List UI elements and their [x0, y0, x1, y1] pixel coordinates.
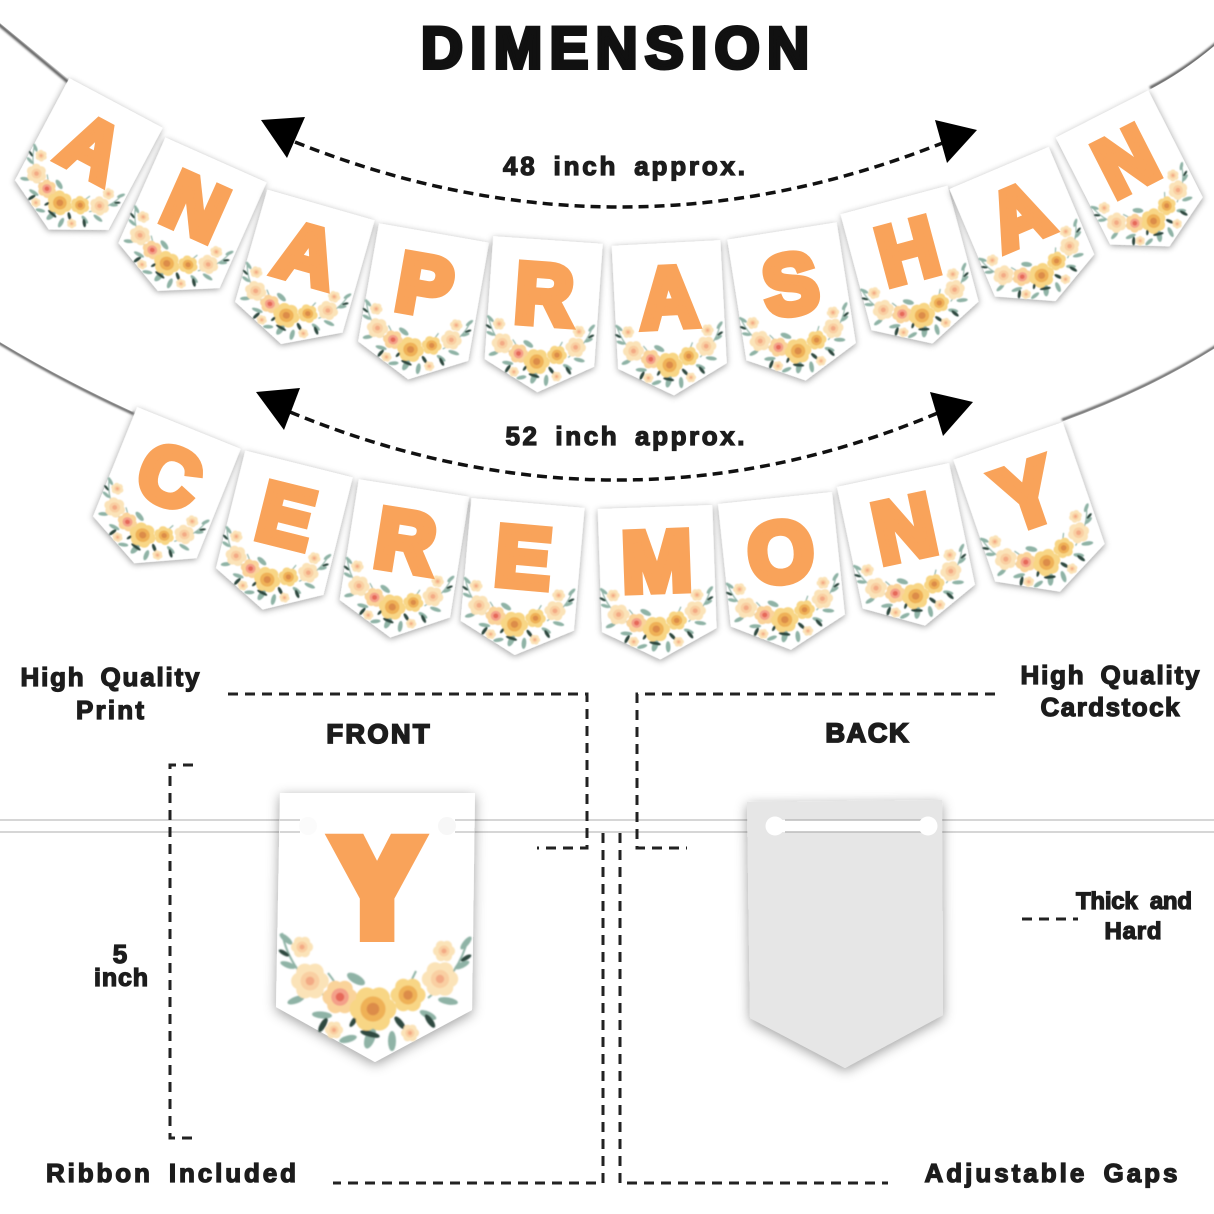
flag C: C [125, 424, 214, 530]
label: high quality cardstock: High Quality [1020, 660, 1200, 690]
flag Y: Y [984, 440, 1069, 551]
flag P: P [390, 236, 459, 336]
label: high quality cardstock: Cardstock [1040, 692, 1180, 722]
flag N [106, 137, 267, 313]
flag N: N [150, 155, 240, 260]
ribbon: top banner ends [0, 18, 1214, 94]
flag S: S [756, 233, 825, 335]
label: 5 inch: 5 [113, 939, 127, 969]
label: ribbon included: Ribbon Included [46, 1158, 296, 1188]
leader lines [228, 694, 1078, 1183]
flag H [839, 186, 986, 358]
flag A [948, 147, 1105, 323]
label: high quality cardstock [1020, 660, 1200, 722]
flag A [610, 240, 728, 398]
flag R [333, 479, 469, 646]
label: 52 inch: 52 inch approx. [506, 421, 744, 451]
flag O: O [743, 502, 818, 603]
flag P [351, 223, 489, 389]
banner: CEREMONY [81, 406, 1114, 662]
flag N [1054, 90, 1214, 271]
flag A: A [975, 163, 1063, 268]
arrow: 48 inch span [261, 117, 977, 207]
flag R: R [369, 490, 442, 592]
label: 5 inch [94, 939, 148, 992]
flag: back [747, 800, 943, 1068]
flag A: A [638, 249, 700, 347]
label: high quality print: High Quality [20, 662, 200, 692]
flag N: N [1080, 107, 1171, 215]
flag N [835, 463, 981, 638]
arrow: 52 inch span [256, 388, 973, 480]
banner: ANAPRASHAN [1, 77, 1214, 398]
flag H: H [868, 200, 948, 304]
ribbon: horizontal [0, 819, 1214, 833]
label: 5 inch: inch [94, 964, 148, 992]
label: thick and hard [1076, 888, 1192, 945]
flag R: R [512, 245, 577, 344]
ribbon: lower banner ends [0, 335, 1214, 426]
label: high quality print [20, 662, 200, 725]
flag C [81, 406, 241, 584]
heading: front: FRONT [326, 719, 430, 749]
flag A: A [266, 204, 347, 306]
dimension bracket: 5 inch [170, 765, 193, 1138]
heading: back: BACK [826, 718, 909, 748]
flag A [226, 189, 375, 359]
flag E [456, 498, 585, 660]
label: 48 inch: 48 inch approx. [503, 151, 745, 181]
flower garland [278, 932, 473, 1051]
flag R [481, 236, 603, 396]
flag E: E [248, 465, 323, 568]
flag N: N [865, 475, 944, 582]
label: adjustable gaps: Adjustable Gaps [924, 1158, 1178, 1188]
title: DIMENSION [421, 16, 809, 81]
flag E [207, 450, 353, 623]
label: high quality print: Print [76, 695, 144, 725]
flag M: M [620, 513, 694, 610]
flag E: E [491, 508, 555, 607]
letter Y: Y [339, 816, 415, 959]
label: thick and hard: Hard [1104, 918, 1162, 945]
flag M [596, 505, 718, 662]
flag A: A [46, 96, 138, 201]
flag Y [952, 422, 1114, 611]
flag A [1, 77, 163, 254]
flag: front [276, 793, 475, 1062]
label: thick and hard: Thick and [1076, 888, 1192, 915]
flag O [716, 492, 848, 656]
flag S [726, 222, 860, 389]
